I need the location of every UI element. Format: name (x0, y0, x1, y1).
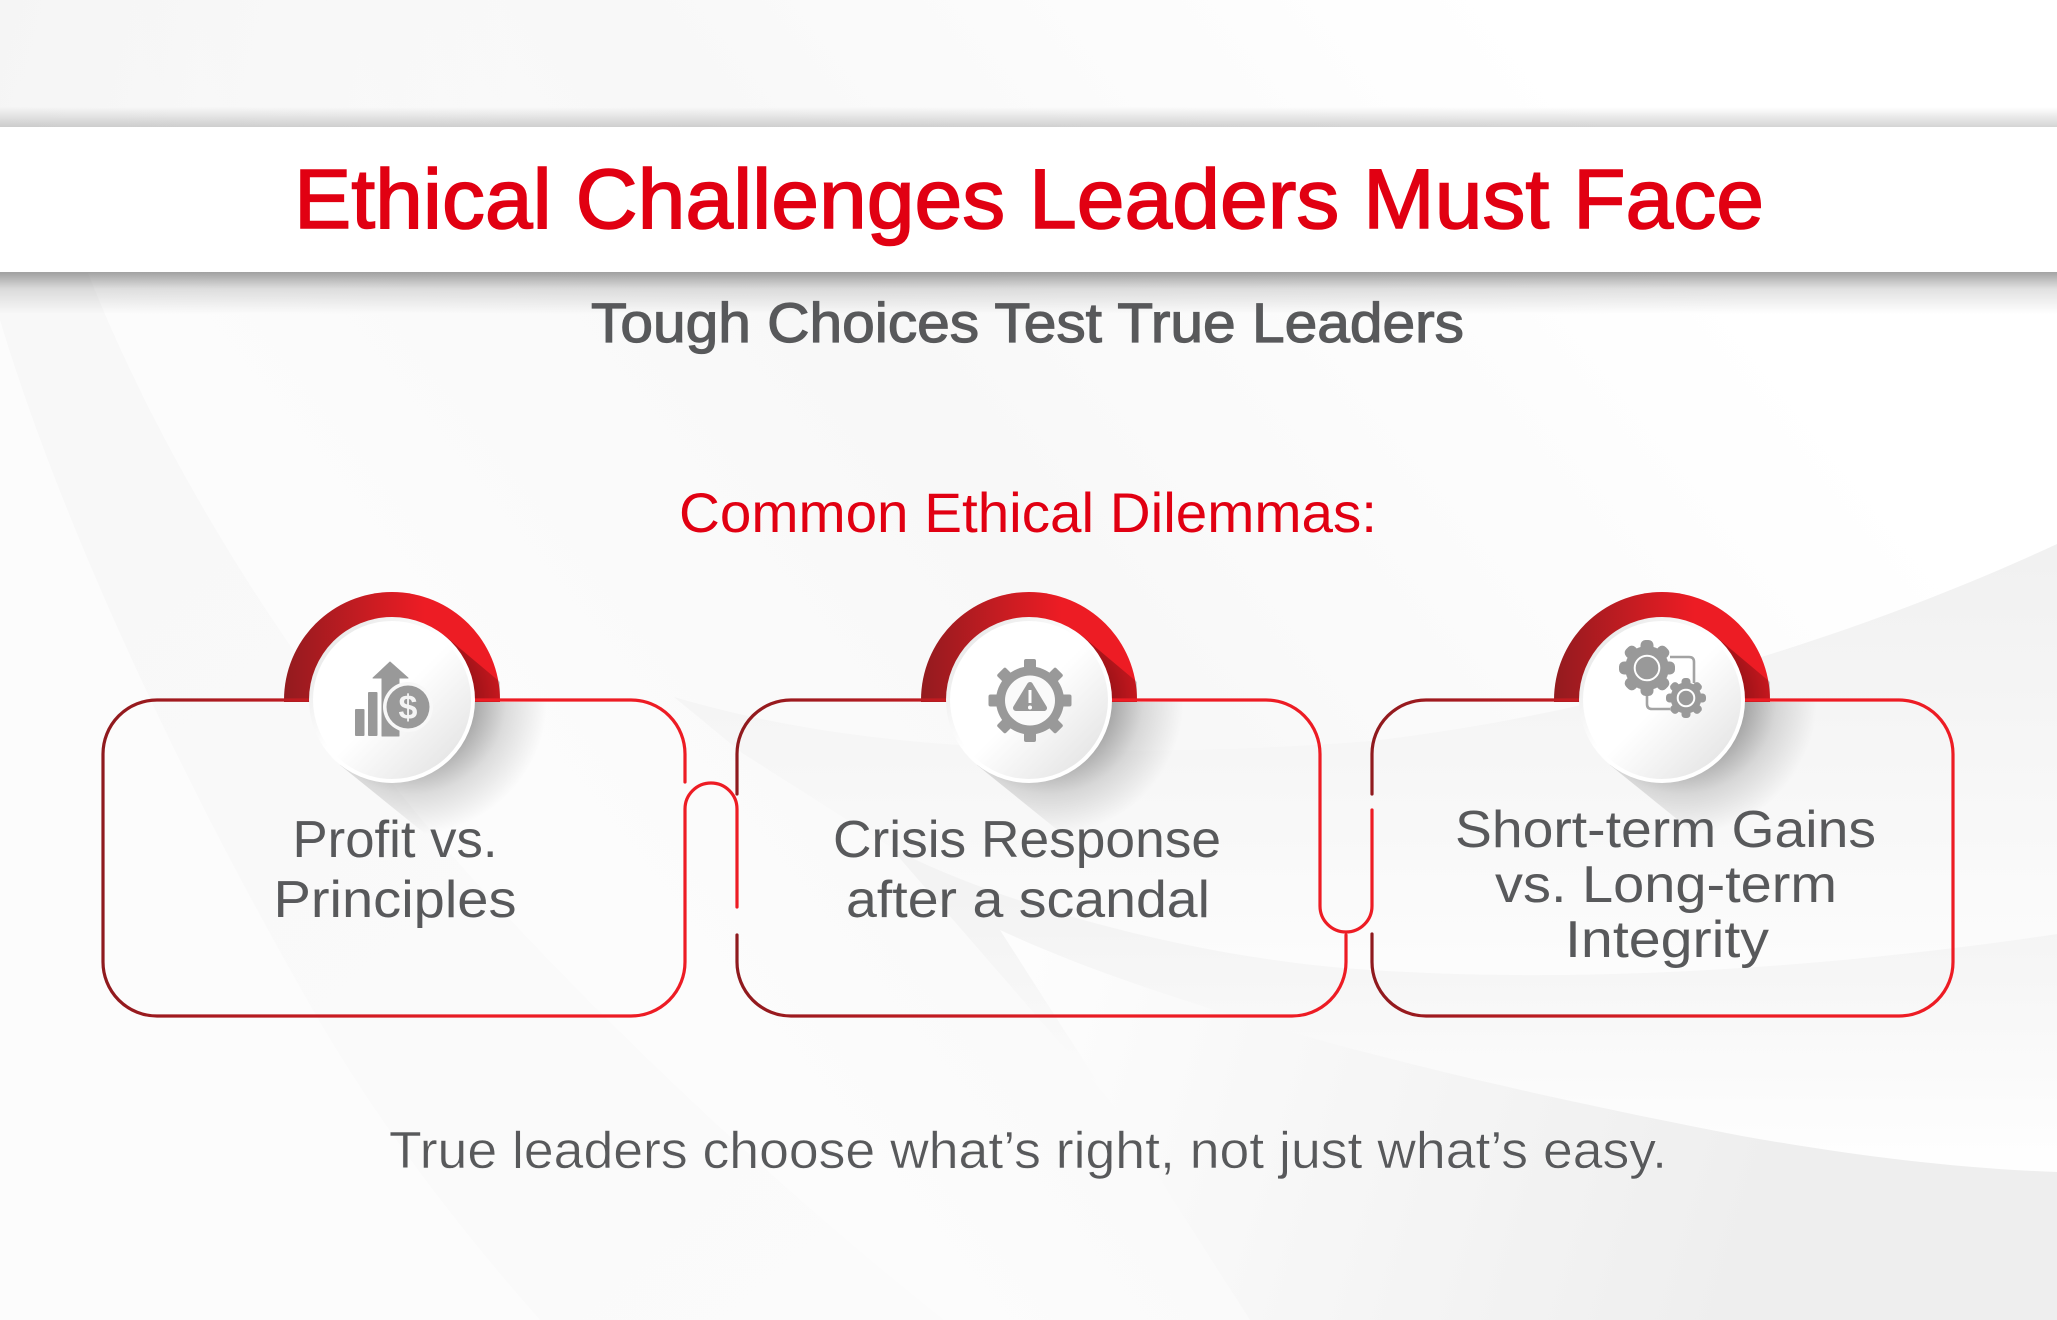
icon: gear with warning triangle (988, 659, 1072, 742)
closing statement: True leaders choose what’s right, not just what’s easy. (389, 1122, 1667, 1180)
card 2 label (833, 811, 1221, 929)
card 2 outline and connector (737, 700, 1372, 1016)
icon: rising bars and dollar coin (355, 662, 433, 736)
icon: rising bars and dollar coin: $ (399, 689, 418, 727)
card 1 shadow (340, 635, 622, 891)
header band (0, 107, 2057, 314)
card 3 red arc (1554, 592, 1770, 702)
card 2 label: after a scandal (846, 871, 1210, 929)
card 1 icon disc (309, 617, 475, 783)
card 3 label: vs. Long-term (1495, 856, 1837, 914)
card 3 shadow (1610, 635, 1892, 891)
section heading: Common Ethical Dilemmas: (679, 481, 1377, 544)
card 3 label: Integrity (1565, 911, 1769, 969)
card 2 shadow (977, 635, 1259, 891)
card 1 red arc (284, 592, 500, 702)
card 1 outline and connector (103, 700, 737, 1016)
card 2 red arc (921, 592, 1137, 702)
icon: linked gears (1619, 640, 1706, 718)
card 2 label: Crisis Response (833, 811, 1221, 869)
card 3 outline (1372, 700, 1953, 1016)
subtitle: Tough Choices Test True Leaders (591, 291, 1464, 354)
card 1 label: Principles (274, 871, 516, 929)
card 3 label: Short-term Gains (1455, 801, 1876, 859)
panel: crisis response (737, 592, 1372, 1016)
panel: short-term vs long-term (1372, 592, 1953, 1016)
card 1 label: Profit vs. (292, 811, 498, 869)
card 2 icon disc (946, 617, 1112, 783)
card 3 label (1455, 801, 1876, 969)
card 3 icon disc (1579, 617, 1745, 783)
card 1 label (274, 811, 516, 929)
panel: profit vs principles (103, 592, 737, 1016)
title: Ethical Challenges Leaders Must Face (294, 152, 1764, 246)
